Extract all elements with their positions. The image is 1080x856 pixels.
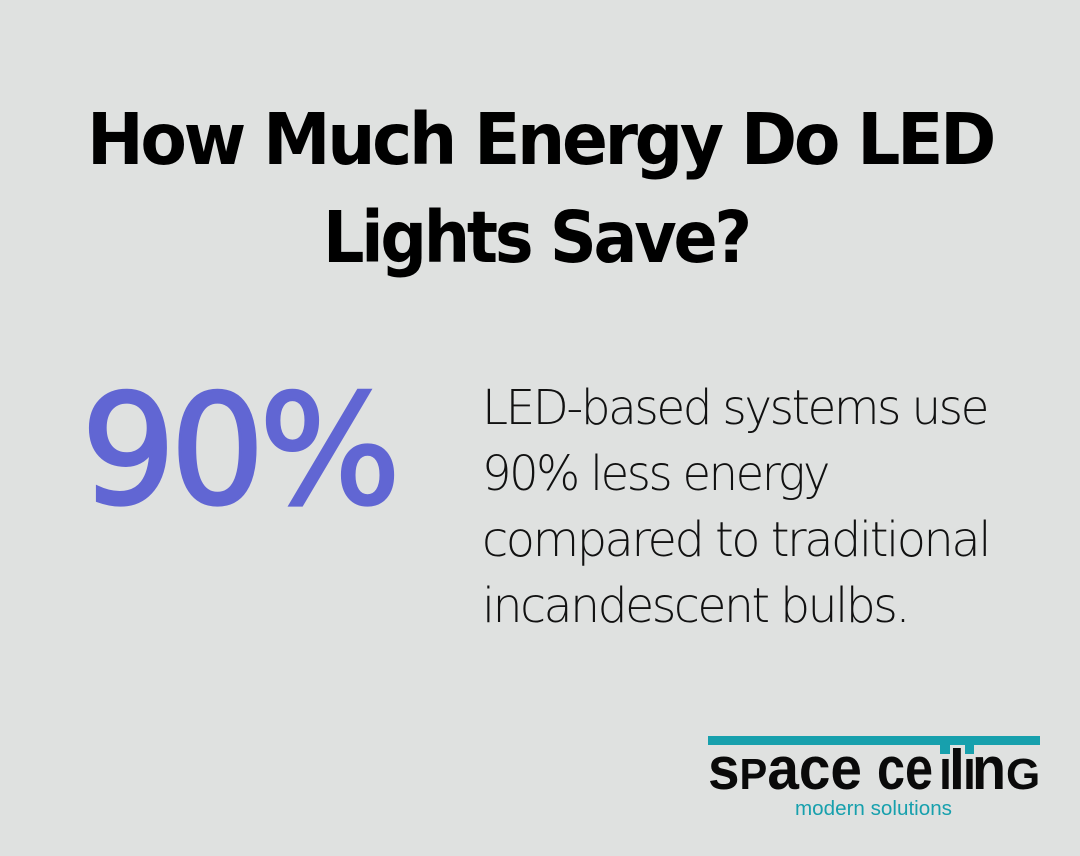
logo wordmark: I — [963, 750, 976, 799]
description text: incandescent bulbs. — [482, 578, 908, 634]
description text: LED-based systems use — [482, 380, 987, 436]
description text: compared to traditional — [482, 512, 989, 568]
logo wordmark: n — [972, 736, 1006, 802]
description text — [482, 380, 989, 634]
logo ceiling bar — [708, 736, 1040, 754]
logo wordmark: ce — [877, 735, 933, 802]
logo wordmark: l — [949, 738, 965, 802]
title — [87, 98, 994, 279]
logo: Space Ceiling — [708, 735, 1040, 820]
description text: 90% less energy — [482, 446, 828, 502]
logo wordmark: G — [1006, 750, 1040, 799]
logo wordmark: I — [939, 750, 952, 799]
logo wordmark: sPace — [708, 735, 862, 802]
logo tagline: modern solutions — [795, 798, 952, 820]
title: Lights Save? — [323, 196, 749, 279]
title: How Much Energy Do LED — [87, 98, 994, 181]
logo wordmark — [708, 735, 1040, 802]
big statistic: 90%: 90% — [81, 362, 395, 539]
